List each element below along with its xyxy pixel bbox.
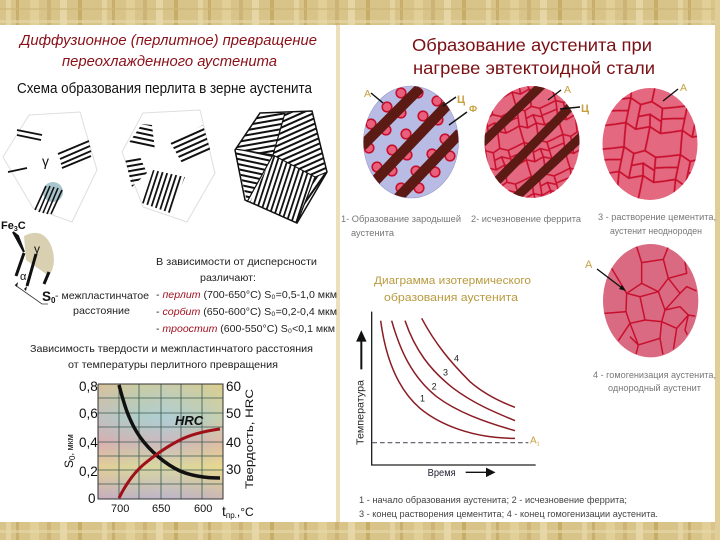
- text: interlamellar spacing: - межпластинчатое: [55, 290, 149, 302]
- labels and arrows: circle 1: Ф: [469, 104, 477, 115]
- axis title: hardness: Твердость, HRC: [244, 389, 256, 489]
- curve: hardness HRC: [119, 429, 220, 498]
- label: S0: 0: [51, 296, 56, 305]
- title: austenite formation: нагреве эвтектоидной стали: [413, 58, 655, 78]
- heading: hardness dependency: от температуры перлитного превращения: [68, 359, 278, 371]
- left axis labels: [79, 379, 98, 506]
- text block: dispersity classes: В зависимости от дисперсности: [156, 256, 317, 268]
- text block: dispersity classes: - перлит (700-650°С) S₀=0,5-1,0 мкм: [156, 289, 337, 301]
- label: A1: А: [530, 435, 537, 446]
- austenite nuclei: [364, 88, 455, 193]
- right axis labels: 50: [226, 406, 241, 421]
- diagram: lamella detail with Fe3C: [1, 220, 56, 305]
- arrow: temperature: [358, 333, 365, 369]
- diagram: circle 1 nucleation: [362, 86, 460, 198]
- labels and arrows: circle 1: [364, 88, 477, 125]
- curve 2: [392, 321, 515, 431]
- labels and arrows: circle 1: Ц: [457, 94, 465, 106]
- heading: hardness dependency: [30, 343, 313, 371]
- caption: stage 4: [593, 370, 716, 393]
- text block: dispersity classes: [156, 256, 337, 335]
- label: A1: 1: [537, 441, 540, 447]
- diagram: circle 3 cementite dissolving: [602, 88, 698, 200]
- diagram: grain with growing colonies: [122, 110, 215, 222]
- axis title: time: Время: [428, 468, 456, 479]
- captions: stages 1 to 3: аустенит неоднороден: [610, 226, 702, 236]
- heading: isothermal diagram: Диаграмма изотермического: [374, 275, 531, 287]
- diagram: lamella detail with Fe3C: C: [18, 220, 26, 232]
- caption: stage 4: 4 - гомогенизация аустенита,: [593, 370, 716, 380]
- diagram: lamella detail with Fe3C: 3: [14, 226, 18, 233]
- cementite bands: [362, 88, 460, 198]
- left axis labels: 0,8: [79, 379, 98, 394]
- captions: stages 1 to 3: [341, 212, 716, 238]
- caption: stage 4: однородный аустенит: [608, 383, 701, 393]
- arrow: time: [466, 469, 494, 476]
- diagram: lamella detail with Fe3C: α: [20, 271, 27, 283]
- curve numbers: 2: [432, 381, 437, 391]
- label: HRC: HRC: [175, 413, 204, 428]
- bottom axis labels: 600: [194, 503, 212, 515]
- cementite bands: [482, 84, 583, 198]
- diagram: lamella detail with Fe3C: γ: [34, 242, 40, 256]
- curve numbers: 1: [420, 394, 425, 404]
- title: austenite formation: Образование аустенита при: [412, 35, 652, 55]
- heading: isothermal diagram: образования аустенита: [384, 292, 519, 304]
- label and arrow: circle 4: [585, 259, 626, 291]
- text block: dispersity classes: различают:: [200, 272, 256, 284]
- legend text: isothermal stages: 3 - конец растворения цементита; 4 - конец гомогенизации аустенита.: [359, 509, 658, 519]
- right axis labels: 30: [226, 462, 241, 477]
- axis title: S0: 0: [68, 455, 77, 460]
- labels and arrows: circle 2: [548, 84, 589, 115]
- heading: hardness dependency: Зависимость твердости и межпластинчатого расстояния: [30, 343, 313, 355]
- heading: isothermal diagram: [374, 275, 531, 304]
- title: pearlite transformation: Диффузионное (перлитное) превращение: [18, 32, 317, 49]
- labels and arrows: circle 2: Ц: [581, 103, 589, 115]
- bottom axis labels: 700: [111, 503, 129, 515]
- labels and arrows: circle 1: А: [364, 88, 371, 100]
- labels and arrows: circle 3: [663, 82, 687, 101]
- legend text: isothermal stages: [359, 495, 658, 519]
- right axis labels: [226, 379, 241, 477]
- left axis labels: 0,4: [79, 435, 98, 450]
- diagram: grain fully transformed into pearlite: [235, 111, 327, 223]
- captions: stages 1 to 3: 1- Образование зародышей: [341, 214, 461, 224]
- heading: pearlite scheme: Схема образования перлита в зерне аустенита: [17, 81, 313, 97]
- title: pearlite transformation: переохлажденного аустенита: [62, 53, 277, 70]
- title: pearlite transformation: [18, 32, 317, 70]
- axis title: S0: S: [62, 460, 76, 468]
- label: S0: S: [42, 289, 51, 304]
- diagram: circle 4 homogeneous austenite: [603, 244, 698, 358]
- curve 4: [422, 318, 515, 407]
- right axis labels: 60: [226, 379, 241, 394]
- curve numbers: 3: [443, 367, 448, 377]
- curve numbers: 4: [454, 353, 459, 363]
- curve 3: [405, 321, 515, 421]
- chart: hardness and spacing vs temperature: [62, 379, 256, 520]
- bottom axis labels: [111, 503, 254, 520]
- bottom axis labels: ,°С: [237, 505, 254, 519]
- bottom axis labels: пр.: [226, 511, 237, 520]
- left axis labels: 0: [88, 491, 96, 506]
- axis title: temperature: Температура: [355, 379, 366, 445]
- curve 1: [381, 321, 515, 438]
- axis title: S0: , мкм: [65, 434, 75, 456]
- text: interlamellar spacing: расстояние: [73, 305, 130, 317]
- diagram: circle 2 ferrite disappearing: [482, 84, 583, 198]
- labels and arrows: circle 2: А: [564, 84, 571, 96]
- bottom axis labels: 650: [152, 503, 170, 515]
- curve numbers: [420, 353, 459, 404]
- diagram: lamella detail with Fe3C: Fe: [1, 220, 14, 232]
- curve: spacing S0: [119, 385, 220, 478]
- captions: stages 1 to 3: 2- исчезновение феррита: [471, 214, 581, 224]
- text block: dispersity classes: - сорбит (650-600°С) S₀=0,2-0,4 мкм: [156, 306, 337, 318]
- right axis labels: 40: [226, 435, 241, 450]
- captions: stages 1 to 3: 3 - растворение цементита,: [598, 212, 716, 222]
- label and arrow: circle 4: А: [585, 259, 593, 271]
- labels and arrows: circle 3: А: [680, 82, 687, 94]
- left axis labels: 0,6: [79, 406, 98, 421]
- text block: dispersity classes: - троостит (600-550°С) S₀<0,1 мкм: [156, 323, 335, 335]
- left axis labels: 0,2: [79, 464, 98, 479]
- bottom axis labels: t: [222, 503, 226, 519]
- legend text: isothermal stages: 1 - начало образования аустенита; 2 - исчезновение феррита;: [359, 495, 627, 505]
- chart: isothermal austenite formation: [355, 312, 540, 479]
- text: interlamellar spacing: [55, 290, 149, 317]
- title: austenite formation: [412, 35, 655, 78]
- diagram: austenite grain with first lamellae: [3, 112, 97, 222]
- captions: stages 1 to 3: аустенита: [351, 228, 394, 238]
- label: gamma: γ: [42, 153, 49, 169]
